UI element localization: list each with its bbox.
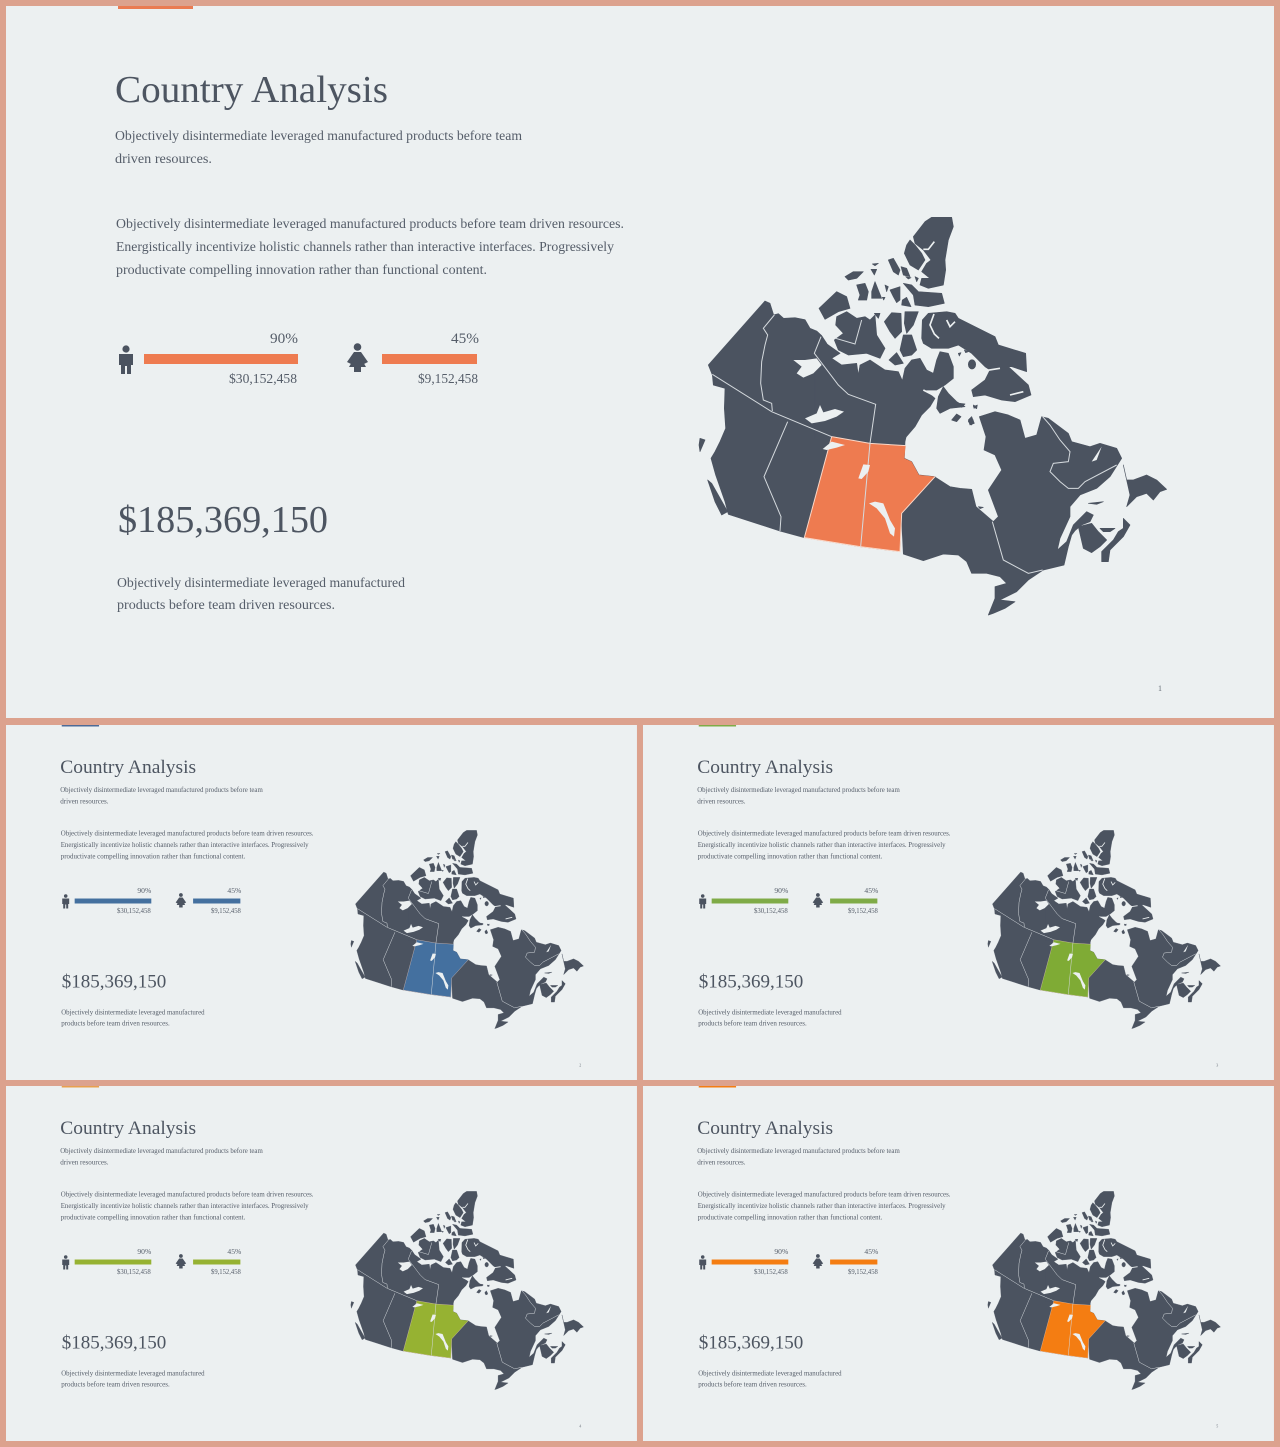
- bar: female 45%: $9,152,458: [211, 907, 241, 915]
- bar: female 45%: [193, 886, 241, 915]
- description: [117, 576, 405, 613]
- description: [698, 1370, 842, 1389]
- bar: male 90%: 90%: [774, 886, 788, 895]
- intro text: Objectively disintermediate leveraged manufactured products before team: [60, 786, 263, 794]
- intro text: driven resources.: [115, 152, 212, 167]
- bar: male 90%: 90%: [137, 886, 151, 895]
- body paragraph: Energistically incentivize holistic channels rather than interactive interfaces. Progressively: [61, 841, 309, 849]
- bar: male 90%: $30,152,458: [754, 1268, 788, 1276]
- big figure: $185,369,150: [699, 1332, 803, 1353]
- bar: male 90%: [712, 886, 788, 915]
- icon: woman: [176, 893, 186, 907]
- bar: male 90%: [144, 331, 298, 387]
- description: Objectively disintermediate leveraged manufactured: [61, 1009, 205, 1017]
- body paragraph: [698, 830, 951, 861]
- bar: female 45%: [193, 1247, 241, 1276]
- description: Objectively disintermediate leveraged manufactured: [61, 1370, 205, 1378]
- icon: man: [699, 1255, 706, 1269]
- intro text: driven resources.: [60, 1158, 109, 1166]
- bar: male 90%: [75, 1247, 151, 1276]
- body paragraph: Objectively disintermediate leveraged manufactured products before team driven resources.: [698, 1191, 951, 1199]
- intro text: Objectively disintermediate leveraged manufactured products before team: [697, 786, 900, 794]
- description: Objectively disintermediate leveraged manufactured: [698, 1370, 842, 1378]
- intro text: [60, 1147, 263, 1166]
- page number: 1: [1158, 684, 1162, 693]
- map of Canada with olive region: [351, 1191, 584, 1390]
- intro text: Objectively disintermediate leveraged manufactured products before team: [115, 129, 522, 144]
- icon: woman: [176, 1254, 186, 1268]
- title: Country Analysis: [115, 69, 388, 111]
- title: Country Analysis: [697, 757, 833, 778]
- intro text: [697, 1147, 900, 1166]
- page number: 4: [579, 1424, 581, 1429]
- icon: woman: [813, 1254, 823, 1268]
- body paragraph: Energistically incentivize holistic channels rather than interactive interfaces. Progressively: [698, 1202, 946, 1210]
- bar: female 45%: 45%: [864, 1247, 878, 1256]
- description: [61, 1370, 205, 1389]
- map of Canada with green region: [988, 830, 1221, 1029]
- title: Country Analysis: [60, 1118, 196, 1139]
- body paragraph: Objectively disintermediate leveraged manufactured products before team driven resources.: [61, 1191, 314, 1199]
- description: products before team driven resources.: [698, 1381, 807, 1389]
- bar: male 90%: $30,152,458: [117, 907, 151, 915]
- body paragraph: productivate compelling innovation rather than functional content.: [698, 853, 883, 861]
- intro text: Objectively disintermediate leveraged manufactured products before team: [60, 1147, 263, 1155]
- body paragraph: [61, 1191, 314, 1222]
- panel: slide 4 olive: [6, 1086, 637, 1441]
- big figure: $185,369,150: [118, 499, 328, 541]
- map of Canada with blue region: [351, 830, 584, 1029]
- panel: slide 1 orange: [6, 6, 1274, 718]
- intro text: [60, 786, 263, 805]
- bar: female 45%: 45%: [227, 886, 241, 895]
- body paragraph: Objectively disintermediate leveraged manufactured products before team driven resources.: [698, 830, 951, 838]
- description: products before team driven resources.: [117, 598, 335, 613]
- title: Country Analysis: [60, 757, 196, 778]
- bar: male 90%: $30,152,458: [117, 1268, 151, 1276]
- map of Canada with bright orange region: [988, 1191, 1221, 1390]
- icon: man: [699, 894, 706, 908]
- page number: 3: [1216, 1063, 1218, 1068]
- bar: female 45%: 45%: [227, 1247, 241, 1256]
- body paragraph: productivate compelling innovation rather than functional content.: [61, 853, 246, 861]
- panel: slide 5 orange: [643, 1086, 1274, 1441]
- bar: female 45%: $9,152,458: [848, 907, 878, 915]
- body paragraph: productivate compelling innovation rather than functional content.: [61, 1214, 246, 1222]
- body paragraph: [116, 217, 624, 278]
- bar: female 45%: $9,152,458: [211, 1268, 241, 1276]
- bar: male 90%: $30,152,458: [229, 372, 297, 387]
- body paragraph: Objectively disintermediate leveraged manufactured products before team driven resources.: [116, 217, 624, 232]
- big figure: $185,369,150: [62, 971, 166, 992]
- intro text: driven resources.: [697, 1158, 746, 1166]
- description: [698, 1009, 842, 1028]
- big figure: $185,369,150: [699, 971, 803, 992]
- icon: man: [119, 345, 133, 374]
- icon: man: [62, 1255, 69, 1269]
- intro text: [115, 129, 522, 167]
- body paragraph: productivate compelling innovation rather than functional content.: [116, 263, 487, 278]
- body paragraph: [61, 830, 314, 861]
- bar: female 45%: $9,152,458: [848, 1268, 878, 1276]
- intro text: driven resources.: [60, 797, 109, 805]
- description: products before team driven resources.: [61, 1020, 170, 1028]
- icon: woman: [347, 343, 368, 372]
- description: products before team driven resources.: [61, 1381, 170, 1389]
- bar: male 90%: 90%: [774, 1247, 788, 1256]
- body paragraph: productivate compelling innovation rather than functional content.: [698, 1214, 883, 1222]
- description: Objectively disintermediate leveraged manufactured: [698, 1009, 842, 1017]
- bar: male 90%: [75, 886, 151, 915]
- big figure: $185,369,150: [62, 1332, 166, 1353]
- bar: female 45%: [830, 1247, 878, 1276]
- icon: man: [62, 894, 69, 908]
- body paragraph: [698, 1191, 951, 1222]
- map of Canada with orange region: [699, 217, 1167, 615]
- page number: 5: [1216, 1424, 1218, 1429]
- bar: female 45%: 45%: [864, 886, 878, 895]
- bar: male 90%: 90%: [137, 1247, 151, 1256]
- body paragraph: Energistically incentivize holistic channels rather than interactive interfaces. Progressively: [116, 240, 614, 255]
- bar: male 90%: $30,152,458: [754, 907, 788, 915]
- bar: female 45%: $9,152,458: [418, 372, 478, 387]
- body paragraph: Energistically incentivize holistic channels rather than interactive interfaces. Progressively: [698, 841, 946, 849]
- bar: male 90%: [712, 1247, 788, 1276]
- intro text: Objectively disintermediate leveraged manufactured products before team: [697, 1147, 900, 1155]
- icon: woman: [813, 893, 823, 907]
- title: Country Analysis: [697, 1118, 833, 1139]
- body paragraph: Energistically incentivize holistic channels rather than interactive interfaces. Progressively: [61, 1202, 309, 1210]
- description: [61, 1009, 205, 1028]
- page number: 2: [579, 1063, 581, 1068]
- intro text: [697, 786, 900, 805]
- bar: female 45%: 45%: [451, 331, 479, 347]
- description: Objectively disintermediate leveraged manufactured: [117, 576, 405, 591]
- description: products before team driven resources.: [698, 1020, 807, 1028]
- bar: female 45%: [382, 331, 479, 387]
- body paragraph: Objectively disintermediate leveraged manufactured products before team driven resources.: [61, 830, 314, 838]
- panel: slide 2 blue: [6, 725, 637, 1080]
- panel: slide 3 green: [643, 725, 1274, 1080]
- bar: female 45%: [830, 886, 878, 915]
- bar: male 90%: 90%: [270, 331, 298, 347]
- intro text: driven resources.: [697, 797, 746, 805]
